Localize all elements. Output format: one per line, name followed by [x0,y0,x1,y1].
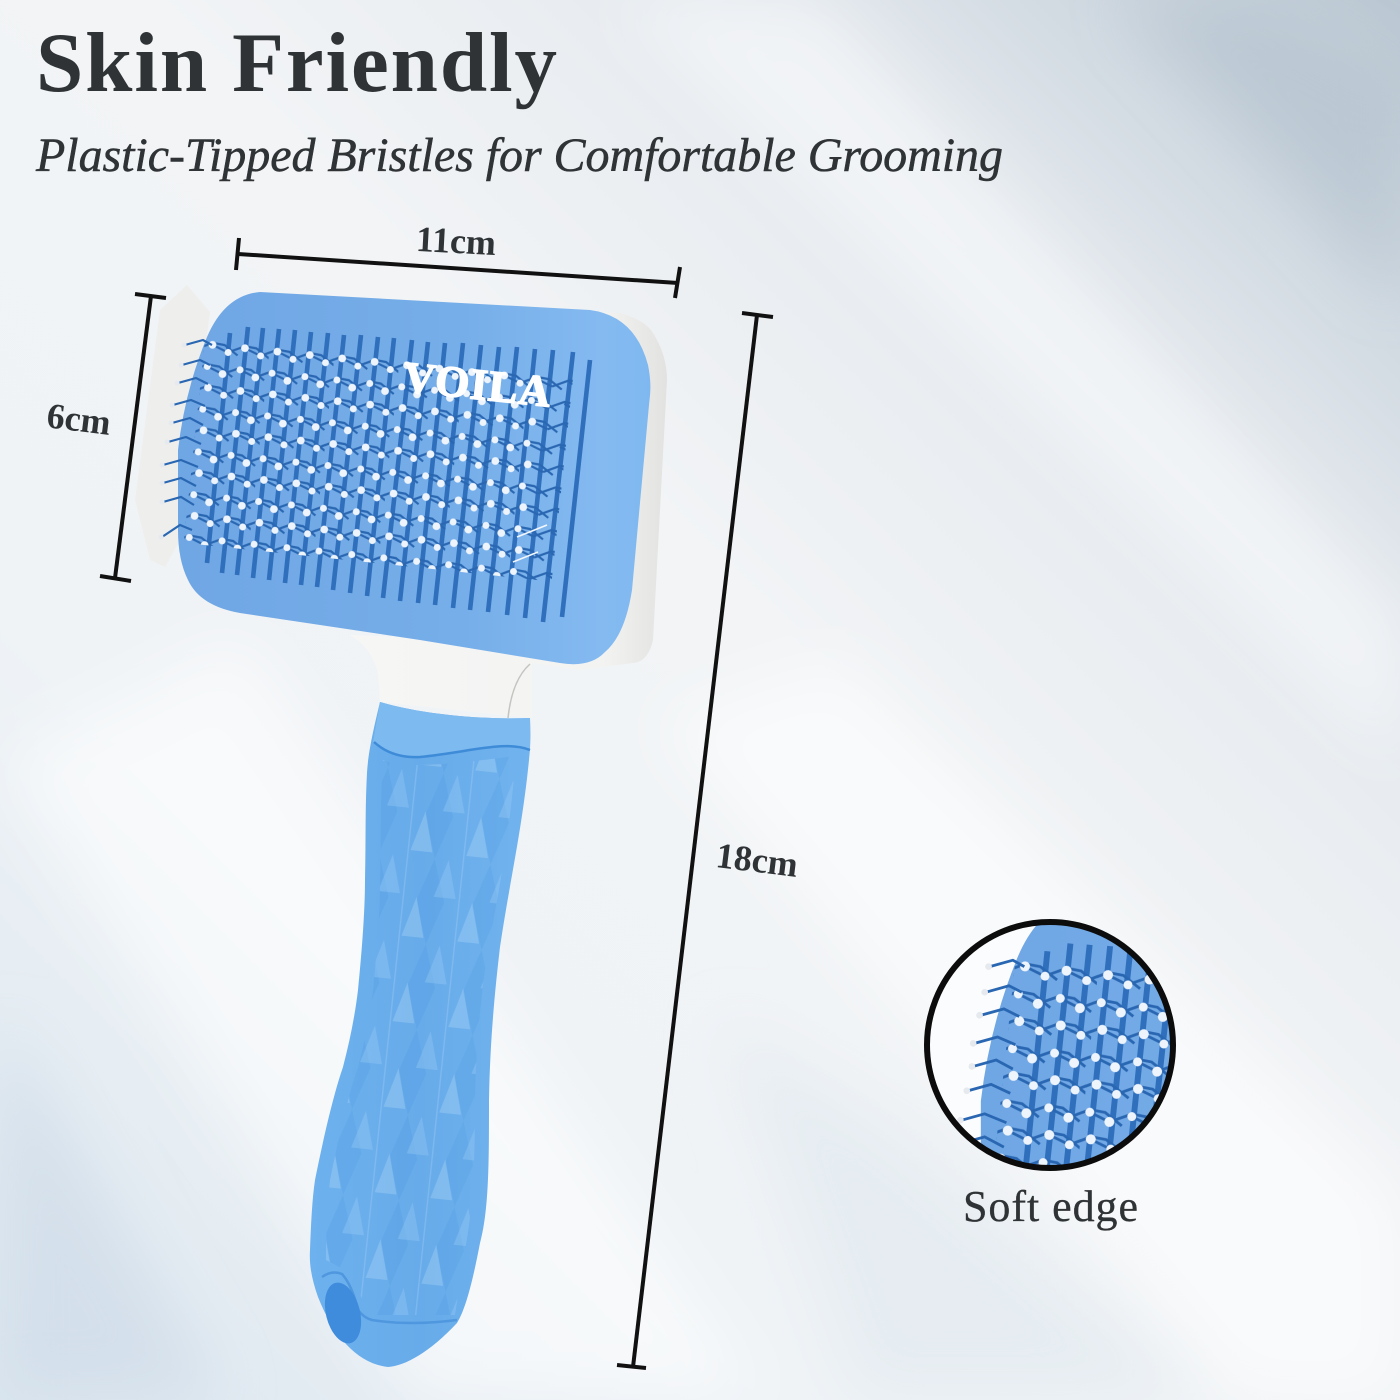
handle hanging hole [319,1279,367,1347]
dimension: height 6cm: 6cm [45,395,113,443]
inset caption: Soft edge [963,1182,1138,1231]
product: slicker brush [135,285,667,1393]
brand logo: VOILA [401,352,553,417]
dimension: width 11cm: 11cm [415,219,497,263]
brush white backing and neck [350,312,667,718]
brush handle [310,702,530,1367]
dimension: length 18cm [617,313,800,1368]
neck seam [508,664,530,718]
dimension: height 6cm [45,294,166,581]
dimension: width 11cm [236,219,680,298]
subtitle: Plastic-Tipped Bristles for Comfortable Grooming [35,129,1003,182]
title: Skin Friendly [36,16,557,110]
dimension: length 18cm: 18cm [714,835,800,885]
brush head with bristles [158,292,650,664]
brush left white shield [135,285,210,567]
inset: soft edge close-up [924,919,1176,1171]
